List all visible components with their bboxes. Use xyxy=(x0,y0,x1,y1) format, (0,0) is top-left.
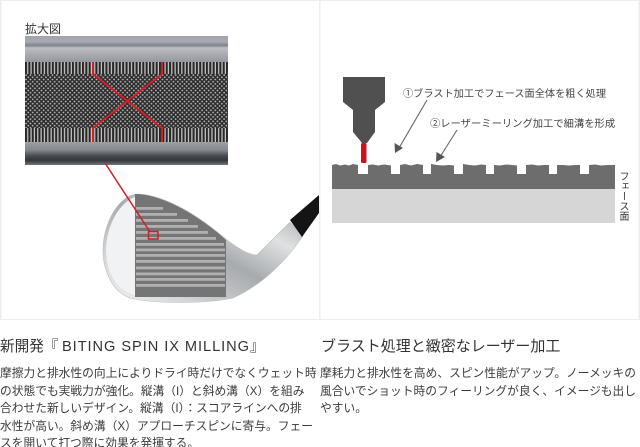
face with score lines xyxy=(135,194,226,297)
club head illustration xyxy=(103,194,319,302)
label: enlarged view: 拡大図 xyxy=(25,22,61,36)
shaft xyxy=(290,195,319,237)
body text right xyxy=(320,366,636,415)
body text left xyxy=(0,366,317,447)
body text right: 風合いでショット時のフィーリングが良く、イメージも出し xyxy=(320,384,636,398)
panel: enlarged milling texture xyxy=(25,36,228,165)
toe highlight xyxy=(106,197,135,295)
red X groove marking xyxy=(93,62,162,142)
face cross-section diagram xyxy=(332,164,615,223)
red leader line and marker square xyxy=(105,163,158,239)
arrow 2 xyxy=(436,130,457,162)
heading left: BITING SPIN IX MILLING xyxy=(62,339,250,355)
body text left: の状態でも実戦力が強化。縦溝（I）と斜め溝（X）を組み xyxy=(0,384,305,398)
blasting nozzle xyxy=(343,77,385,163)
callout 2: ②レーザーミーリング加工で細溝を形成 xyxy=(430,117,615,130)
arrow 1 xyxy=(394,100,427,153)
body text left: 合わせた新しいデザイン。縦溝（I）：スコアラインへの排 xyxy=(0,401,302,415)
callout 1: ①ブラスト加工でフェース面全体を粗く処理 xyxy=(403,87,606,100)
body text right: やすい。 xyxy=(320,402,367,415)
body text right: 摩耗力と排水性を高め、スピン性能がアップ。ノーメッキの xyxy=(320,366,636,380)
body text left: 摩擦力と排水性の向上によりドライ時だけでなくウェット時 xyxy=(0,366,317,380)
hosel and head body xyxy=(103,194,303,302)
heading left: 新開発『 xyxy=(0,339,58,355)
heading right: ブラスト処理と緻密なレーザー加工 xyxy=(321,337,560,355)
vertical label: face surface: フェース面 xyxy=(617,171,629,222)
body text left: 水性が高い。斜め溝（X）アプローチスピンに寄与。フェー xyxy=(0,419,313,433)
heading left: 』 xyxy=(250,339,265,355)
